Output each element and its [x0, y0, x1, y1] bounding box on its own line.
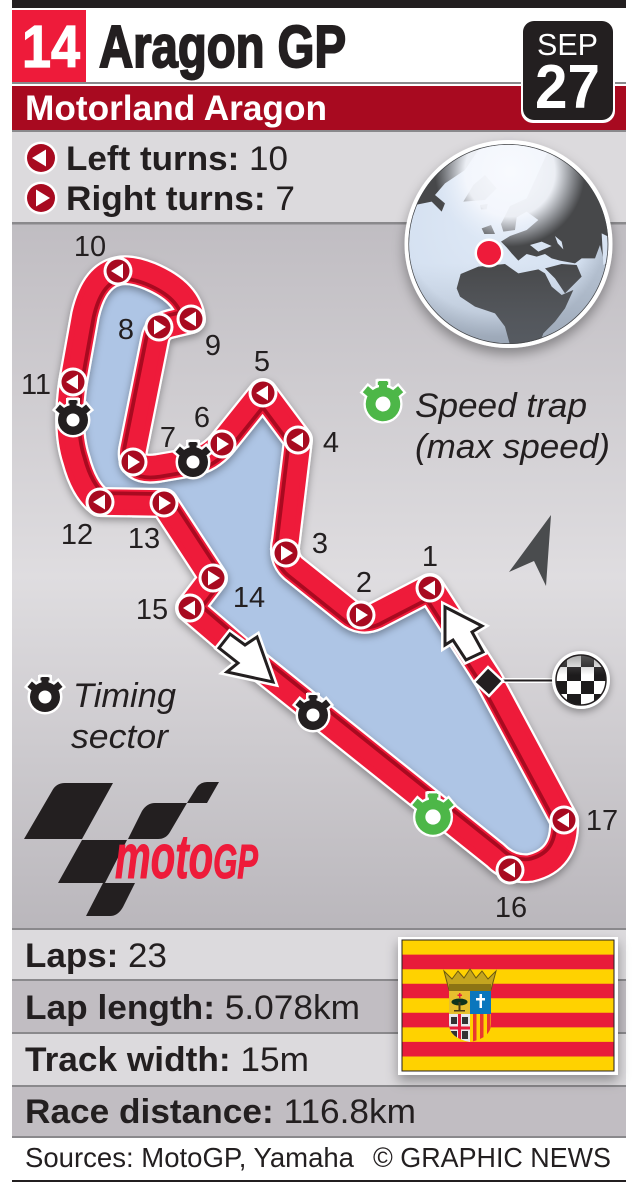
speed trap legend [363, 381, 610, 466]
lap length row [12, 981, 626, 1032]
MotoGP logo [24, 782, 259, 916]
turn number labels [21, 231, 618, 924]
track width row [12, 1034, 626, 1085]
turn number labels: 3 [312, 528, 328, 560]
turn number labels: 11 [21, 369, 51, 401]
header: round number and title [12, 10, 346, 82]
track width row: Track width: 15m [25, 1041, 309, 1079]
location marker [474, 238, 504, 268]
timing sector markers [55, 400, 331, 730]
left turns row: Left turns: 10 [66, 140, 288, 178]
turn number labels: 12 [61, 519, 93, 551]
sources footer: Sources: MotoGP, Yamaha [25, 1142, 354, 1173]
turn number labels: 8 [118, 314, 134, 346]
timing sector legend: Timing [73, 677, 176, 715]
turn number labels: 1 [422, 541, 438, 573]
turns panel [12, 132, 626, 222]
Aragon flag [398, 937, 618, 1075]
speed trap legend: Speed trap [415, 387, 587, 425]
turn number labels: 15 [136, 594, 168, 626]
turn number labels: 10 [74, 231, 106, 263]
finish line connector and diamond [474, 667, 560, 696]
circuit name band: Motorland Aragon [25, 89, 327, 128]
stats table [12, 930, 626, 1138]
map panel background [12, 224, 626, 928]
speed trap marker on track [412, 793, 454, 835]
north arrow [509, 515, 551, 586]
circuit map [21, 231, 618, 924]
flag red stripes [402, 955, 614, 1056]
speed trap legend: (max speed) [415, 428, 610, 466]
turn number labels: 4 [323, 427, 339, 459]
circuit name band [12, 86, 626, 130]
direction arrow: start straight [445, 607, 483, 660]
date badge [521, 20, 615, 123]
race distance row [12, 1087, 626, 1136]
turn number labels: 16 [495, 892, 527, 924]
turn number labels: 7 [160, 422, 176, 454]
turn number labels: 5 [254, 346, 270, 378]
turn number labels: 13 [128, 523, 160, 555]
turn number labels: 14 [233, 582, 265, 614]
coat of arms [444, 969, 496, 1042]
turn number labels: 9 [205, 330, 221, 362]
infield [70, 270, 564, 868]
lap length row: Lap length: 5.078km [25, 989, 360, 1027]
globe [395, 130, 625, 360]
turn number labels: 6 [194, 402, 210, 434]
race distance row: Race distance: 116.8km [25, 1093, 416, 1131]
direction arrow: after turn 15 [219, 634, 273, 682]
timing sector legend [27, 677, 176, 756]
turn number labels: 17 [586, 805, 618, 837]
timing sector legend: sector [71, 718, 170, 756]
right turns row: Right turns: 7 [66, 180, 295, 218]
chequered flag icon [552, 651, 610, 709]
top black bar [12, 0, 626, 8]
laps row: Laps: 23 [25, 937, 167, 975]
sources footer [25, 1142, 611, 1173]
title: Aragon GP [99, 14, 346, 80]
sources footer: © GRAPHIC NEWS [373, 1142, 611, 1173]
round number box: 14 [22, 14, 80, 80]
turn markers [58, 256, 578, 884]
track [70, 270, 564, 868]
date badge: SEP [537, 27, 598, 62]
globe land masses [416, 147, 608, 344]
MotoGP logo: motoGP [115, 823, 259, 892]
turn number labels: 2 [356, 567, 372, 599]
laps row [12, 930, 626, 979]
date badge: 27 [535, 53, 600, 122]
